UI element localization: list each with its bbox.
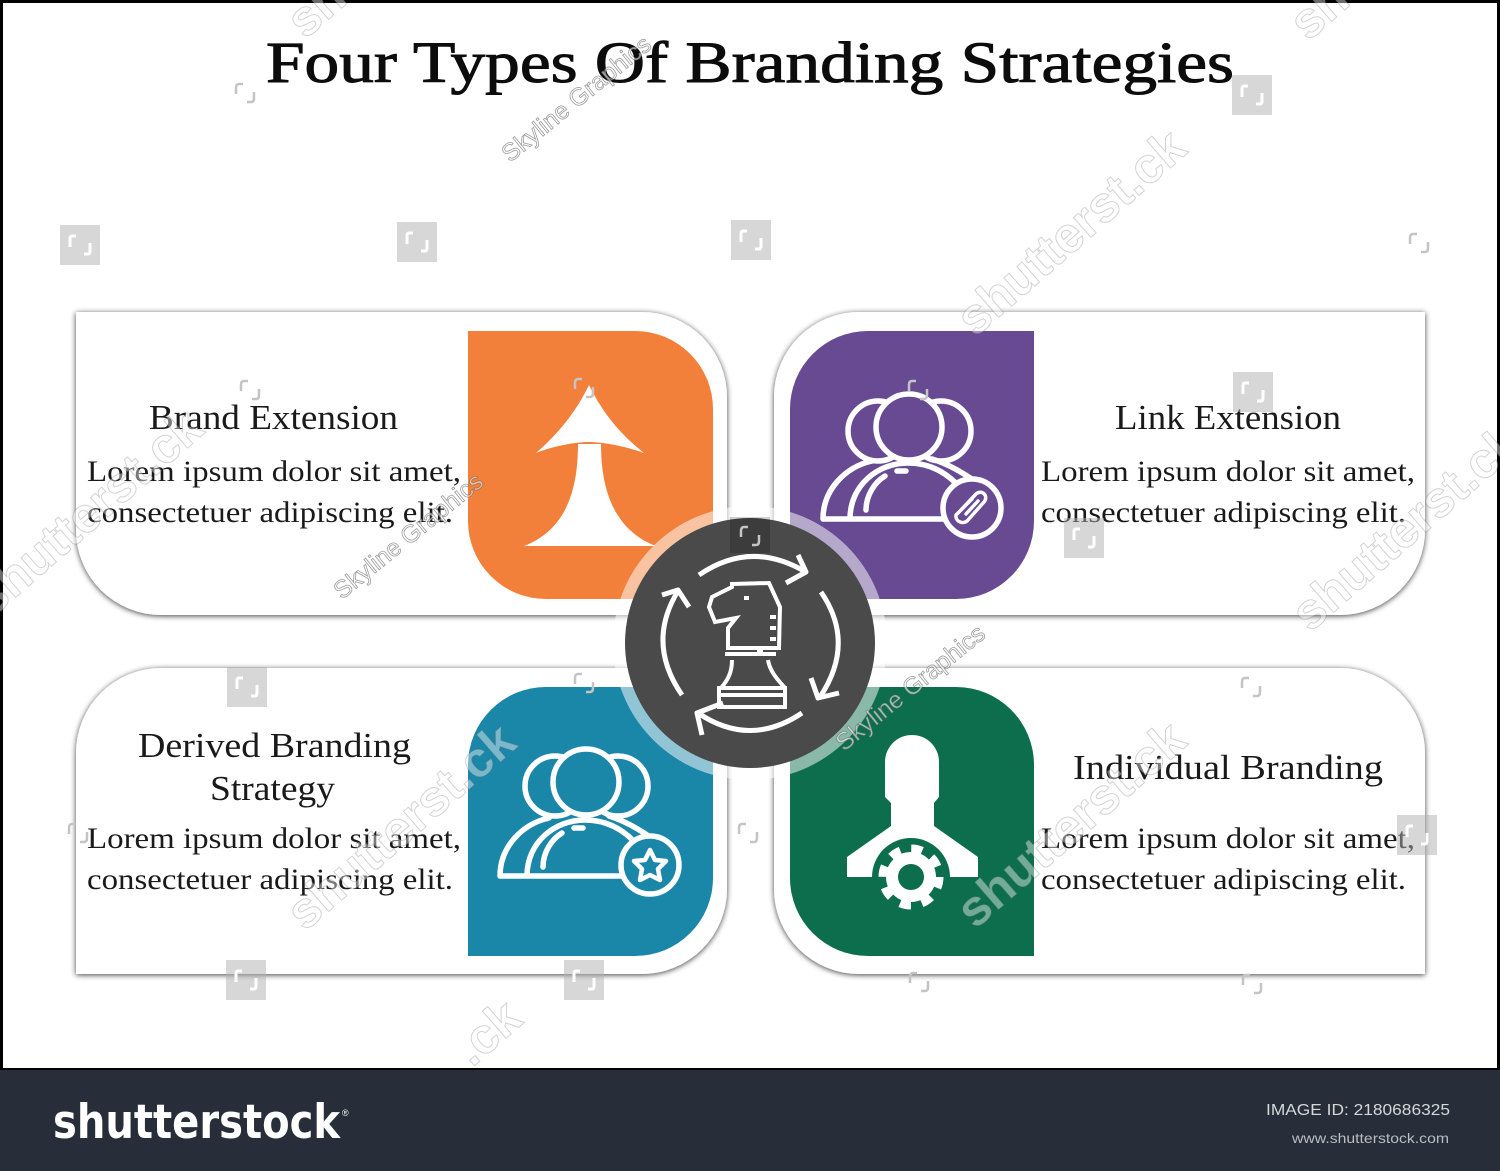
watermark: Skyline Graphics repeats: Skyline Graphics: [831, 620, 991, 757]
panel background: brand extension: [76, 312, 727, 615]
watermark: shutterstock repeats: shutterst.ck: [275, 712, 526, 940]
text: brand extension description: Lorem ipsum dolor sit amet,: [87, 455, 461, 488]
icon: people with paperclip: [823, 394, 1001, 537]
text: link extension description: consectetuer adipiscing elit.: [1041, 496, 1406, 529]
footer website: www.shutterstock.com: [1291, 1130, 1449, 1146]
watermark: outline logo marks: [69, 84, 1428, 993]
icon: chess knight: [709, 583, 785, 707]
text: brand extension description: [87, 455, 461, 529]
icon: people with star: [500, 749, 679, 894]
watermark: square logo tiles: [60, 75, 1437, 1000]
icon: person with gear: [847, 735, 978, 916]
panel: derived branding strategy: [76, 668, 727, 974]
title: Four Types Of Branding Strategies: [266, 30, 1234, 95]
watermark: shutterstock repeats: shutterst.ck: [945, 118, 1196, 346]
footer logo: shutterstock: [53, 1095, 341, 1150]
centre badge: chess knight with cycle arrows: [613, 506, 887, 780]
watermark: Skyline Graphics repeats: Skyline Graphics: [497, 31, 657, 168]
watermark: shutterstock repeats: .ck: [442, 988, 532, 1076]
footer bar: [0, 1070, 1500, 1171]
colour tile: teal: [468, 687, 713, 956]
colour tile: orange: [468, 331, 713, 599]
heading: derived branding strategy: [138, 726, 411, 808]
panel: link extension: [774, 312, 1425, 615]
text: derived branding description: [87, 822, 461, 896]
panel: individual branding: [774, 668, 1425, 974]
panel: brand extension: [76, 312, 727, 615]
colour tile: purple: [790, 331, 1034, 599]
colour tile: green: [790, 687, 1034, 956]
text: individual branding description: Lorem ipsum dolor sit amet,: [1041, 822, 1415, 855]
heading: individual branding: Individual Branding: [1073, 748, 1383, 787]
footer image id: IMAGE ID: 2180686325: [1266, 1102, 1450, 1119]
text: link extension description: Lorem ipsum dolor sit amet,: [1041, 455, 1415, 488]
watermark: shutterstock repeats: shutterst.ck: [945, 710, 1196, 938]
centre translucent ring: [613, 506, 887, 780]
heading: derived branding strategy: Strategy: [210, 769, 336, 808]
centre dark circle: [625, 518, 875, 768]
text: derived branding description: consectetuer adipiscing elit.: [87, 863, 453, 896]
icon: cycle arrows: [662, 555, 839, 735]
text: individual branding description: [1041, 822, 1415, 896]
heading: derived branding strategy: Derived Branding: [138, 726, 411, 765]
icon: up arrow: [524, 385, 656, 546]
watermark: Skyline Graphics repeats: [329, 31, 991, 757]
footer logo: ®: [342, 1108, 349, 1118]
text: link extension description: [1041, 455, 1415, 529]
panel background: derived branding strategy: [76, 668, 727, 974]
panel background: link extension: [774, 312, 1425, 615]
text: individual branding description: consectetuer adipiscing elit.: [1041, 863, 1406, 896]
text: brand extension description: consectetuer adipiscing elit.: [87, 496, 453, 529]
heading: link extension: Link Extension: [1115, 398, 1341, 437]
watermark: Skyline Graphics repeats: Skyline Graphics: [329, 468, 489, 605]
footer background: [0, 1070, 1500, 1171]
text: derived branding description: Lorem ipsum dolor sit amet,: [87, 822, 461, 855]
panel background: individual branding: [774, 668, 1425, 974]
heading: brand extension: Brand Extension: [149, 398, 398, 437]
